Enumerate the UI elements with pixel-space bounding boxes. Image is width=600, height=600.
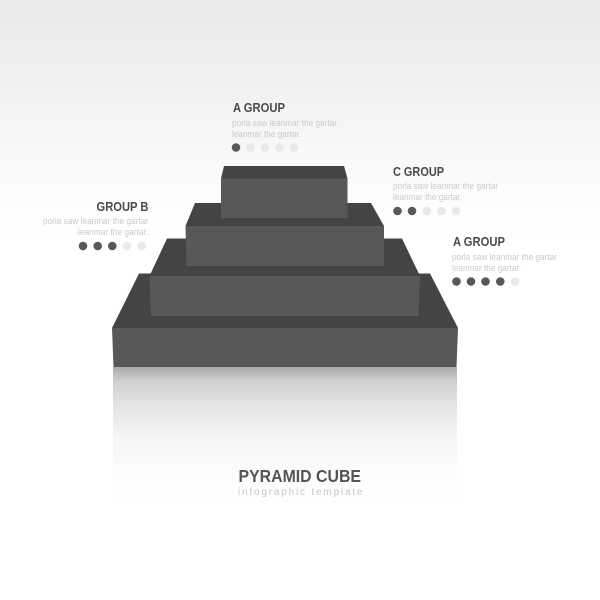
callout: C GROUP: [393, 164, 498, 215]
tier 3: [150, 238, 420, 316]
callout: A GROUP right: [452, 234, 557, 286]
pyramid reflection: [113, 367, 457, 507]
pyramid cube: [112, 166, 458, 367]
subtitle: infographic template: [238, 487, 363, 498]
tier 1 top: [221, 166, 348, 218]
tier 4 base: [112, 274, 458, 367]
callout: GROUP B: [43, 199, 148, 250]
title: PYRAMID CUBE: PYRAMID CUBE: [238, 466, 361, 486]
rating dots 2 of 5: [393, 207, 460, 215]
heading: C GROUP: [393, 164, 444, 179]
heading: GROUP B: [96, 199, 148, 214]
description: [452, 252, 557, 273]
description: [43, 216, 148, 237]
description: porla saw leanmar the gartar: [452, 252, 557, 262]
heading: A GROUP: [233, 100, 285, 115]
description: porla saw leanmar the gartar: [393, 181, 498, 191]
background gradient: [0, 0, 600, 240]
rating dots 3 of 5: [79, 242, 146, 250]
description: [232, 118, 337, 139]
description: leanmar the gartar.: [232, 129, 301, 139]
description: leanmar the gartar.: [393, 192, 462, 202]
description: porla saw leanmar the gartar: [43, 216, 148, 226]
description: leanmar the gartar.: [452, 263, 521, 273]
description: leanmar the gartar.: [78, 227, 148, 237]
rating dots 1 of 5: [232, 143, 298, 152]
tier 2: [186, 203, 384, 266]
callout: A GROUP top: [232, 100, 337, 152]
description: [393, 181, 498, 202]
rating dots 4 of 5: [452, 277, 519, 286]
heading: A GROUP: [453, 234, 505, 249]
description: porla saw leanmar the gartar: [232, 118, 337, 128]
